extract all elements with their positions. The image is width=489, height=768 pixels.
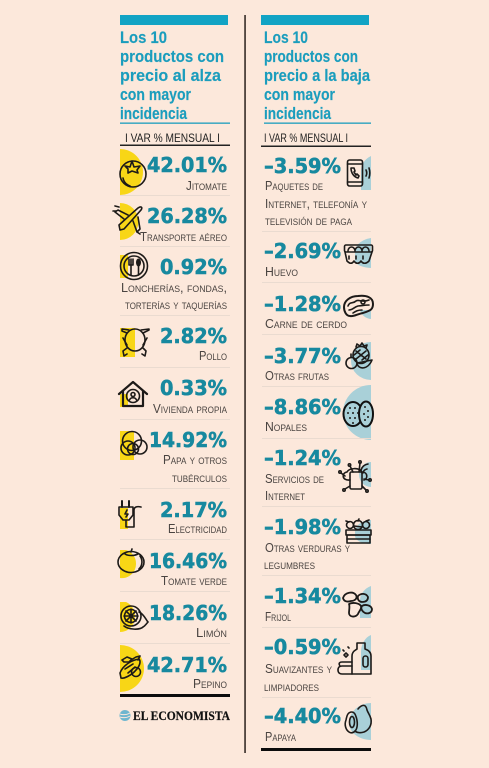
header bar right [261, 15, 369, 25]
row: Huevo [264, 238, 372, 279]
row: Paquetes de internet: Paquetes de [265, 178, 323, 193]
panel: price increases [113, 15, 230, 723]
icon: lemon [120, 602, 148, 632]
row: Pollo: Pollo [199, 348, 227, 363]
icon: detergent [338, 635, 371, 674]
icon: cucumber [120, 645, 144, 692]
row: Servicios de internet: Servicios de [265, 471, 324, 486]
row: Transporte aéreo [113, 203, 227, 244]
row: Limón: 18.26% [149, 601, 227, 625]
row: Loncherías: Loncherías, fondas, [121, 280, 227, 295]
row: Pollo: 2.82% [160, 324, 227, 348]
row: Carne de cerdo [264, 292, 373, 331]
row: Servicios de internet: –1.24% [264, 446, 341, 470]
row: Otras frutas [264, 342, 372, 383]
center divider [244, 15, 246, 753]
heading left: Los 10 [120, 29, 167, 47]
icon: house [119, 382, 147, 407]
row: Paquetes de internet: Internet, telefonía y [265, 196, 367, 211]
row: Otras verduras y legumbres: –1.98% [264, 515, 341, 539]
icon: internet of things [339, 461, 371, 492]
row: Loncherías [120, 252, 227, 312]
logo: El Economista: EL ECONOMISTA [133, 709, 230, 723]
row: Loncherías: 0.92% [160, 255, 227, 279]
row: Pepino [120, 645, 227, 692]
row: Servicios de internet [264, 446, 371, 503]
panel: price decreases [261, 15, 373, 751]
icon: chicken [120, 328, 149, 357]
row: Carne de cerdo: Carne de cerdo [265, 316, 347, 331]
icon: nopales [343, 385, 373, 440]
row: Huevo: –2.69% [264, 239, 341, 263]
heading right: Los 10 [264, 29, 308, 47]
row: Papa y otros tubérculos: 14.92% [149, 428, 227, 452]
row: Electricidad [119, 498, 227, 536]
row: Papaya: Papaya [265, 729, 296, 744]
row: Vivienda propia: 0.33% [160, 376, 227, 400]
row: Papaya: –4.40% [264, 704, 341, 728]
row: Papa y otros tubérculos: Papa y otros [163, 452, 227, 467]
icon: smartphone [348, 156, 371, 190]
heading right: incidencia [264, 105, 332, 123]
row: Tomate verde [118, 549, 227, 588]
row: Papa y otros tubérculos [120, 428, 227, 485]
icon: egg carton [344, 238, 372, 268]
row: Otras verduras y legumbres: Otras verduras y [265, 540, 350, 555]
row: Pollo [120, 324, 227, 363]
row: Limón [120, 601, 227, 640]
row: Otras frutas: Otras frutas [265, 368, 329, 383]
icon: pork meat [344, 296, 373, 319]
icon: beans [343, 586, 372, 618]
icon: papaya [345, 703, 371, 740]
row: Frijol: –1.34% [264, 584, 341, 608]
row: Carne de cerdo: –1.28% [264, 292, 341, 316]
row: Suavizantes y limpiadores [264, 635, 371, 694]
row: Vivienda propia: Vivienda propia [153, 401, 227, 416]
row: Otras verduras y legumbres: legumbres [264, 557, 315, 572]
row: Electricidad: Electricidad [168, 521, 227, 536]
row: Frijol [264, 584, 372, 624]
row: Transporte aéreo: Transporte aéreo [140, 229, 227, 244]
row: Tomate verde: Tomate verde [161, 573, 227, 588]
row: Otras frutas: –3.77% [264, 344, 341, 368]
row: Transporte aéreo: 26.28% [147, 204, 227, 228]
row: Electricidad: 2.17% [160, 498, 227, 522]
heading right: productos con [264, 48, 358, 66]
icon: plate and cutlery [120, 252, 148, 280]
row: Tomate verde: 16.46% [149, 549, 227, 573]
icon: fruit [346, 342, 372, 380]
heading left: productos con [120, 48, 224, 66]
row: Huevo: Huevo [265, 264, 298, 279]
icon: tomato [120, 149, 146, 195]
heading left [120, 29, 224, 123]
header bar left [120, 15, 228, 25]
row: Paquetes de internet: –3.59% [264, 154, 341, 178]
row: Suavizantes y limpiadores: limpiadores [264, 679, 319, 694]
heading right [264, 29, 371, 123]
icon: plug [119, 501, 141, 529]
icon: vegetable crate [346, 519, 371, 544]
row: Frijol: Frijol [265, 609, 291, 624]
row: Jitomate [120, 149, 227, 195]
row: Pepino: 42.71% [147, 653, 227, 677]
row: Nopales [264, 385, 373, 440]
row: Pepino: Pepino [193, 676, 227, 691]
row: Paquetes de internet: televisión de paga [265, 213, 352, 228]
column label left: I VAR % MENSUAL I [125, 131, 220, 145]
icon: potatoes [120, 431, 147, 460]
row: Otras verduras y legumbres [264, 515, 371, 572]
heading left: precio al alza [120, 67, 222, 85]
row: Loncherías: torterías y taquerías [125, 297, 227, 312]
icon: airplane [113, 203, 142, 240]
row: Nopales: Nopales [265, 419, 307, 434]
row: Suavizantes y limpiadores: –0.59% [264, 635, 341, 659]
row: Paquetes de internet [264, 154, 371, 228]
row: Limón: Limón [196, 625, 227, 640]
heading left: con mayor [120, 86, 191, 104]
row: Jitomate: Jitomate [186, 178, 227, 193]
heading right: precio a la baja [264, 67, 371, 85]
column label right: I VAR % MENSUAL I [264, 131, 348, 145]
row: Papaya [264, 703, 371, 744]
row: Suavizantes y limpiadores: Suavizantes y [265, 661, 332, 676]
heading right: con mayor [264, 86, 335, 104]
row: Nopales: –8.86% [264, 395, 341, 419]
row: Servicios de internet: Internet [265, 488, 305, 503]
row: Papa y otros tubérculos: tubérculos [172, 470, 227, 485]
row: Jitomate: 42.01% [147, 153, 227, 177]
heading left: incidencia [120, 105, 188, 123]
row: Vivienda propia [119, 376, 227, 416]
icon: green tomato [118, 549, 144, 578]
